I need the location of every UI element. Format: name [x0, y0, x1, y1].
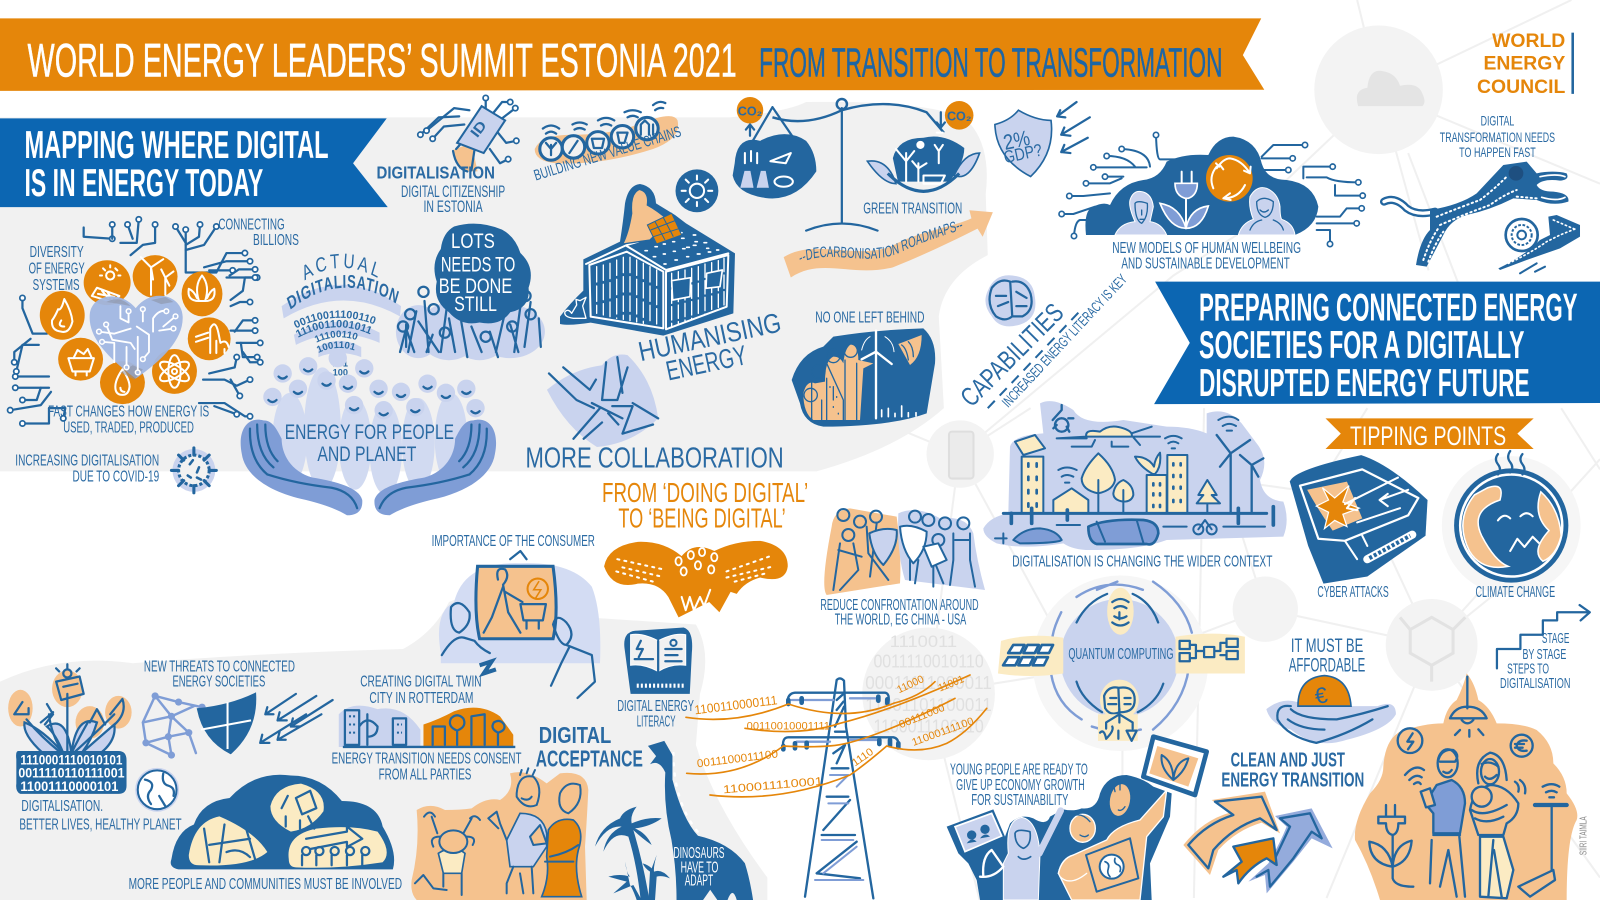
text: energy transition consent: FROM ALL PARTIES [379, 767, 471, 784]
heading banner: preparing connected [1154, 282, 1600, 405]
background circle: binary: 1100011100110 [873, 716, 984, 737]
icon: 2% GDP shield [995, 102, 1090, 177]
text: diversity of energy systems [29, 244, 85, 294]
text: more people: MORE PEOPLE AND COMMUNITIES MUST BE INVOLVED [129, 876, 402, 893]
arrow: staircase [1497, 605, 1590, 668]
illustration: reduce confrontation [824, 508, 985, 595]
text: cyber attacks: CYBER ATTACKS [1317, 584, 1389, 601]
text: clean and just: CLEAN AND JUST [1231, 749, 1345, 771]
text: digitalisation: DIGITALISATION [377, 163, 495, 183]
icon: consumer [439, 551, 600, 698]
illustration: young people with placards [947, 737, 1207, 900]
icon: 2% GDP shield: 2% [1001, 126, 1032, 155]
icon: 2% GDP shield: GDP? [1002, 140, 1044, 167]
text: lots needs to be done still: STILL [454, 292, 497, 316]
illustration: family at home [1355, 673, 1577, 900]
icon: digital ID hand: ID [468, 118, 490, 141]
text: reduce confrontation [820, 597, 979, 628]
text: building new value chains: BUILDING NEW VALUE CHAINS [532, 123, 683, 184]
illustration: electricity pylon: 11000111100 [910, 715, 976, 749]
icon: plant from data: 0011110110111001 [18, 766, 125, 782]
text: digital energy literacy: DIGITAL ENERGY [617, 698, 694, 715]
icon: digital twin city [339, 706, 515, 747]
background circle: binary: 00011111000011 [865, 672, 992, 693]
text: increasing digitalisation: DUE TO COVID-19 [72, 469, 159, 486]
text: actual digitalisation: 1110011001011 [296, 320, 372, 338]
icon: hot planet [1454, 451, 1568, 583]
text: increasing digitalisation [15, 452, 159, 486]
text: connecting billions [218, 217, 299, 249]
background network [898, 0, 1600, 900]
text: actual digitalisation: 101 [333, 358, 348, 368]
cat [565, 297, 586, 318]
text: digital transformation: TO HAPPEN FAST [1459, 145, 1536, 161]
text: clean and just: ENERGY TRANSITION [1221, 770, 1364, 792]
title: WORLD ENERGY LEADERS’ SUMMIT ESTONIA 2021 [28, 35, 737, 87]
icon: no one left behind [792, 328, 935, 427]
text: green transition: GREEN TRANSITION [863, 200, 962, 217]
text: young people: GIVE UP ECONOMY GROWTH [956, 777, 1085, 794]
logo: World Energy Council: COUNCIL [1477, 76, 1565, 98]
text: new threats [144, 658, 295, 691]
text: lots needs to be done still: NEEDS TO [441, 252, 515, 276]
text: digital acceptance: DIGITAL [539, 722, 611, 748]
illustration: energy for people and planet: AND PLANET [317, 442, 416, 466]
text: humanising energy: ENERGY [663, 339, 749, 386]
icon: new models cloud [1062, 135, 1363, 244]
text: energy transition consent [332, 750, 521, 784]
text: young people: YOUNG PEOPLE ARE READY TO [950, 761, 1088, 778]
heading banner: mapping where digital [0, 118, 388, 207]
text: reduce confrontation: REDUCE CONFRONTATION AROUND [820, 597, 979, 614]
illustration: electricity pylon: 11001 [937, 673, 966, 694]
heading banner: tipping points: TIPPING POINTS [1350, 421, 1506, 451]
text: no one left behind: NO ONE LEFT BEHIND [815, 309, 924, 326]
text: digitalisation: IN ESTONIA [423, 198, 483, 216]
icon: community cloud [171, 775, 394, 869]
text: digital transformation [1440, 114, 1555, 161]
background circle: binary: 0011110010110 [873, 650, 984, 671]
background circle: blank [1233, 577, 1298, 642]
text: better lives: BETTER LIVES, HEALTHY PLANET [19, 817, 182, 834]
text: new models: NEW MODELS OF HUMAN WELLBEING [1112, 240, 1301, 257]
text: new threats: NEW THREATS TO CONNECTED [144, 658, 295, 675]
text: actual digitalisation [282, 254, 401, 378]
energy glyphs [52, 257, 229, 395]
text: actual digitalisation: 00110011100110 [294, 310, 376, 328]
text: digital twin [360, 674, 482, 707]
text: actual digitalisation: DIGITALISATION [286, 275, 399, 310]
logo: World Energy Council: ENERGY [1483, 52, 1565, 74]
text: doing digital [602, 477, 808, 534]
text: lots needs to be done still: BE DONE [439, 274, 512, 298]
background circle: phone [927, 420, 994, 488]
icon: virus [171, 448, 216, 493]
icon: value chains [535, 102, 678, 163]
text: digitalisation: DIGITAL CITIZENSHIP [401, 183, 505, 201]
text: lots needs to be done still [396, 224, 545, 360]
background circle: climate ring [1442, 456, 1581, 595]
text: it must be affordable [1289, 635, 1365, 676]
text: doing digital: TO ‘BEING DIGITAL’ [618, 503, 786, 534]
text: stage by stage [1500, 631, 1570, 692]
text: digital acceptance: ACCEPTANCE [536, 745, 643, 771]
icon: plant from data: 11001110000101 [20, 779, 118, 795]
icon: shield and network [142, 692, 333, 759]
text: diversity of energy systems: OF ENERGY [29, 260, 85, 277]
icon: digital energy book [624, 628, 692, 694]
text: digital acceptance [536, 722, 643, 771]
text: digital energy literacy [617, 698, 694, 731]
binary labels on wires: 1100110000111 [694, 693, 778, 717]
text: new threats: ENERGY SOCIETIES [172, 674, 265, 691]
text: young people: FOR SUSTAINABILITY [971, 792, 1068, 809]
background circle: cloud [1314, 26, 1443, 154]
caring hands [241, 420, 362, 515]
text: doing digital: FROM ‘DOING DIGITAL’ [602, 477, 808, 508]
energy for people label: ENERGY FOR PEOPLE [285, 420, 454, 444]
illustration: electricity pylon: 11000 [895, 673, 926, 696]
icon: cyber attack [1290, 455, 1428, 584]
icon: transition arrows [1183, 792, 1333, 893]
heading banner: mapping where digital: IS IN ENERGY TODAY [24, 162, 263, 205]
illustration: electricity pylon: 00110010001111 [747, 720, 830, 732]
circuit lines [10, 219, 260, 423]
text: clean and just [1221, 749, 1364, 792]
logo: World Energy Council [1477, 30, 1574, 98]
orange energy circles [40, 255, 231, 404]
panel: lower grey region [0, 590, 767, 900]
icon: orange butterfly wings [604, 541, 788, 617]
snail [1498, 215, 1580, 270]
illustration: electricity pylon: 1100011110001 [723, 776, 823, 796]
background circle: binary: 11001101100011 [865, 694, 992, 715]
icon: hand with coin [1266, 676, 1396, 743]
icon: house with solar roof [560, 184, 735, 336]
CO2 down [945, 101, 973, 130]
icon: leopard [1384, 162, 1580, 273]
icon: sun [676, 169, 718, 212]
text: new models [1112, 240, 1301, 272]
logo: World Energy Council: WORLD [1492, 30, 1565, 52]
text: new models: AND SUSTAINABLE DEVELOPMENT [1121, 255, 1290, 272]
heading banner: mapping where digital: MAPPING WHERE DIGITAL [24, 124, 329, 167]
illustration: giraffe dinosaur: ADAPT [685, 873, 713, 890]
people silhouettes [272, 367, 467, 495]
icon: carbon scale: CO₂ [738, 103, 762, 118]
text: digitalisation context: DIGITALISATION IS CHANGING THE WIDER CONTEXT [1012, 553, 1272, 570]
text: stage by stage: STEPS TO [1507, 661, 1549, 677]
icon: collaboration hands [547, 355, 658, 447]
illustration: giraffe dinosaur: HAVE TO [681, 859, 718, 876]
illustration: giraffe dinosaur [648, 741, 753, 900]
arrow: decarbonisation roadmaps: --DECARBONISATION ROADMAPS-- [800, 222, 962, 260]
illustration: electricity pylon: 1110 [850, 746, 876, 769]
text: digital twin: CREATING DIGITAL TWIN [360, 674, 482, 691]
text: capabilities: CAPABILITIES [954, 297, 1069, 412]
illustration: electricity pylon: 0011100011100 [696, 748, 779, 770]
illustration: electricity pylon: 00111000 [897, 702, 947, 731]
text: better lives [19, 798, 182, 834]
text: humanising energy [636, 307, 784, 386]
text: it must be affordable: AFFORDABLE [1289, 654, 1365, 676]
background circle: hexagon [1386, 599, 1478, 691]
subtitle: FROM TRANSITION TO TRANSFORMATION [759, 40, 1222, 86]
text: connecting billions: CONNECTING [218, 217, 285, 234]
text: digital energy literacy: LITERACY [637, 714, 676, 731]
illustration: electricity pylon [686, 673, 987, 898]
icon: carbon scale: CO₂ [947, 108, 972, 123]
text: artist signature: SIIRI TAIMLA [1579, 816, 1590, 855]
text: stage by stage: STAGE [1542, 631, 1569, 647]
icon: carbon scale [733, 97, 980, 231]
text: digital transformation: DIGITAL [1481, 114, 1514, 130]
text: energy transition consent: ENERGY TRANSITION NEEDS CONSENT [332, 750, 521, 767]
text: fast changes: USED, TRADED, PRODUCED [63, 420, 194, 437]
icon: hand with coin: € [1313, 682, 1330, 709]
icon: globe [135, 767, 180, 812]
text: more collaboration: MORE COLLABORATION [526, 442, 784, 474]
title banner [0, 18, 1264, 91]
circuit [1062, 135, 1363, 244]
text: better lives: DIGITALISATION. [21, 798, 103, 815]
text: stage by stage: BY STAGE [1522, 647, 1566, 663]
CO2 up [737, 97, 763, 123]
illustration: digital acceptance people [411, 768, 588, 900]
background circle: quantum ring [1033, 576, 1208, 751]
text: young people [950, 761, 1088, 809]
icon: quantum computing [998, 582, 1245, 741]
text: diversity of energy systems: DIVERSITY [30, 244, 84, 261]
text: reduce confrontation: THE WORLD, EG CHINA - USA [835, 611, 967, 628]
icon: brain [985, 275, 1035, 326]
text: importance of consumer: IMPORTANCE OF THE CONSUMER [432, 533, 595, 550]
panel: upper grey region [0, 102, 988, 471]
green pan [867, 153, 980, 184]
text: actual digitalisation: ACTUAL [304, 254, 378, 280]
orange data wires [686, 675, 987, 797]
illustration: palm trees [595, 807, 670, 900]
icon: plant from data [8, 664, 132, 795]
illustration: giraffe dinosaur: DINOSAURS [673, 845, 724, 862]
text: actual digitalisation: 1001101 [316, 341, 354, 353]
text: increasing digitalisation: INCREASING DIGITALISATION [15, 452, 159, 469]
background circle: binary: 1110011 [890, 633, 957, 651]
smiling heads [263, 349, 485, 419]
background circle: binary [862, 628, 995, 760]
text: it must be affordable: IT MUST BE [1291, 635, 1363, 657]
text: fast changes [48, 403, 209, 437]
icon: quantum computing: QUANTUM COMPUTING [1068, 646, 1173, 663]
illustration: energy for people and planet [241, 349, 496, 515]
text: humanising energy: HUMANISING [636, 307, 784, 367]
person on roof [623, 189, 668, 244]
text: capabilities: INCREASED ENERGY LITERACY IS KEY [999, 271, 1131, 411]
heart [90, 296, 183, 379]
text: actual digitalisation: 100 [333, 368, 348, 378]
text: digitalisation [377, 163, 505, 216]
text: fast changes: FAST CHANGES HOW ENERGY IS [48, 403, 209, 420]
text: actual digitalisation: 11100110 [314, 330, 358, 342]
text: diversity of energy systems: SYSTEMS [33, 277, 80, 294]
icon: digital ID hand [420, 98, 516, 171]
arrow: decarbonisation roadmaps [784, 210, 993, 278]
text: lots needs to be done still: LOTS [451, 229, 495, 253]
illustration: smart city [983, 401, 1287, 550]
text: connecting billions: BILLIONS [253, 232, 299, 249]
icon: connected energy heart [10, 219, 260, 423]
icon: plant from data: 1110001110010101 [20, 752, 122, 768]
text: digital twin: CITY IN ROTTERDAM [369, 690, 473, 707]
